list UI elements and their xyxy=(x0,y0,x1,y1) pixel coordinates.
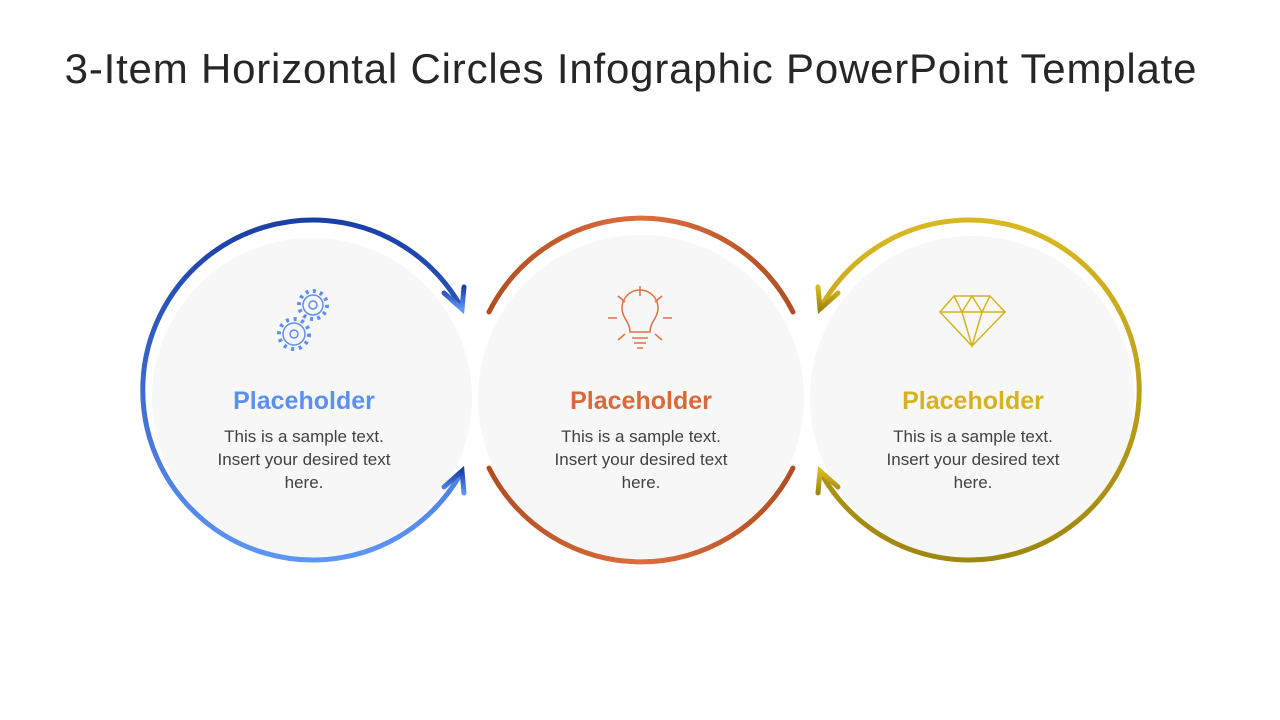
icon: diamond xyxy=(940,296,1005,346)
text: item 2: here. xyxy=(622,473,660,492)
text: item 1: Insert your desired text xyxy=(218,450,390,469)
text: item 1 xyxy=(218,387,390,492)
title: 3-Item Horizontal Circles Infographic PowerPoint Template xyxy=(65,45,1197,92)
text: item 3: This is a sample text. xyxy=(893,427,1053,446)
text: item 3: Placeholder xyxy=(902,387,1044,415)
ring: right yellow xyxy=(818,220,1139,560)
ring: middle orange xyxy=(489,218,793,562)
icon: bulb xyxy=(608,286,672,348)
ring: left blue xyxy=(143,220,464,560)
text: item 1: here. xyxy=(285,473,323,492)
text: item 3: here. xyxy=(954,473,992,492)
text: item 2 xyxy=(555,387,728,492)
text: item 2: Insert your desired text xyxy=(555,450,727,469)
text: item 2: This is a sample text. xyxy=(561,427,721,446)
text: item 3 xyxy=(887,387,1060,492)
text: item 3: Insert your desired text xyxy=(887,450,1059,469)
text: item 1: This is a sample text. xyxy=(224,427,384,446)
fills xyxy=(152,235,1134,561)
icon: gears xyxy=(279,291,327,349)
text: item 2: Placeholder xyxy=(570,387,712,415)
text: item 1: Placeholder xyxy=(233,387,375,415)
